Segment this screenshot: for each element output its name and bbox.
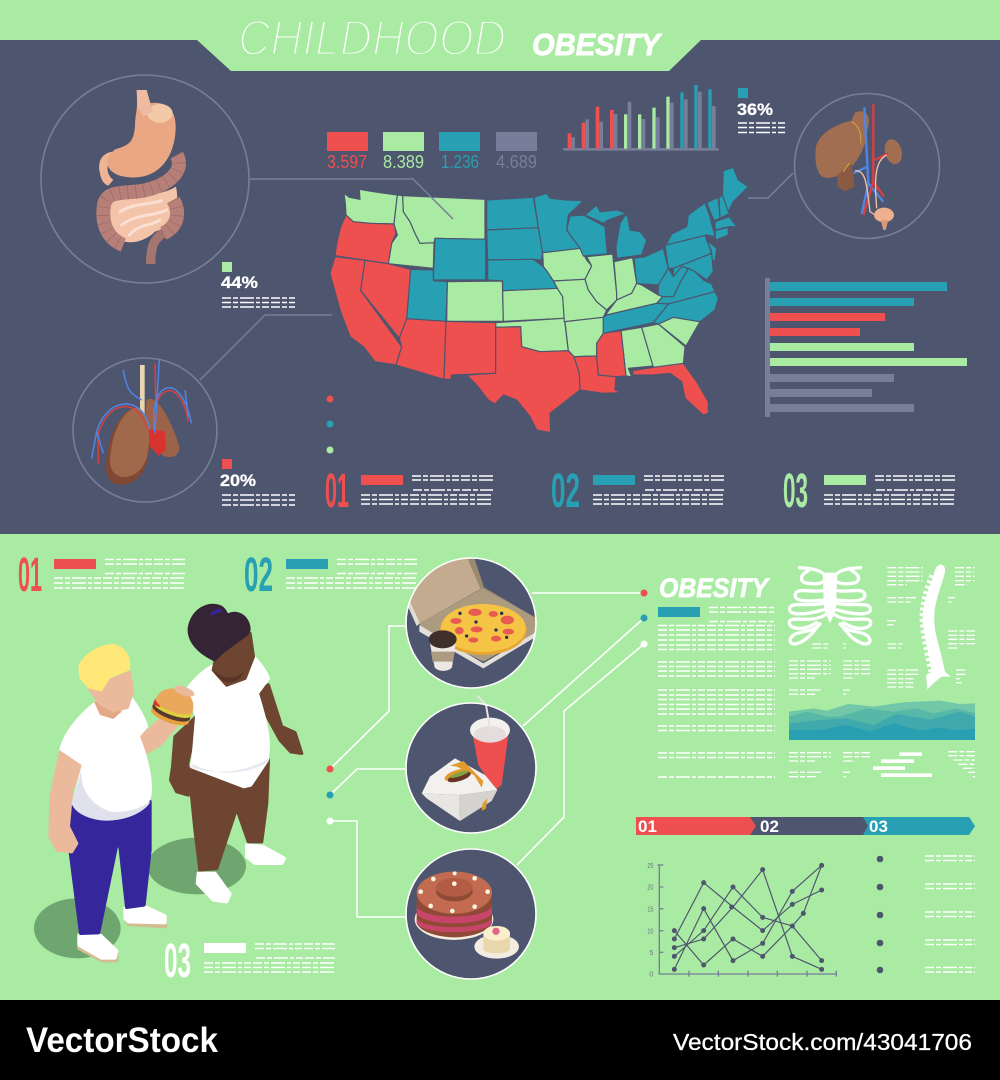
chart: horizontal bars bbox=[765, 278, 967, 417]
map: green states bbox=[344, 189, 700, 377]
stat: 20 percent: 20% bbox=[220, 471, 256, 490]
skeleton: ribcage, spine, captions and area chart bbox=[789, 564, 975, 777]
map: United States coloured by group bbox=[330, 167, 748, 433]
icon: burger in hand bbox=[149, 679, 200, 729]
circle: pizza and coffee bbox=[403, 555, 537, 688]
stat: 36 percent: 36% bbox=[737, 100, 773, 119]
text block: obesity body copy bbox=[658, 608, 775, 777]
character: girl bbox=[171, 604, 302, 902]
circle: liver, kidney, bladder bbox=[794, 94, 940, 238]
block 03 on green: 03 bbox=[164, 935, 191, 988]
list: chart legend dots and captions bbox=[877, 856, 975, 973]
legend: colour key with values bbox=[327, 132, 537, 172]
block 02 on green: 02 bbox=[244, 549, 273, 602]
footer: url text: VectorStock.com/43041706 bbox=[673, 1029, 972, 1055]
chart: line chart: 20 bbox=[647, 885, 653, 892]
stat: 44 percent bbox=[221, 262, 295, 307]
chart: line chart: 0 bbox=[649, 972, 653, 979]
circle: digestive organs bbox=[41, 75, 249, 283]
connector dots bbox=[326, 590, 648, 824]
connectors: food circles to dots bbox=[330, 593, 644, 917]
legend: colour key with values: 1.236 bbox=[441, 152, 479, 172]
footer: watermark bar bbox=[0, 1000, 1000, 1080]
block 01 in dark panel: 01 bbox=[325, 465, 349, 518]
circle: lungs and heart bbox=[73, 358, 217, 502]
arrow band: 01 02 03: 02 bbox=[760, 817, 779, 836]
block 01 on green bbox=[18, 549, 185, 602]
chart: layered area bbox=[789, 701, 975, 740]
legend: colour key with values: 3.597 bbox=[327, 152, 367, 172]
chart: line chart: 5 bbox=[649, 950, 653, 957]
connector lines: organs to map bbox=[200, 173, 793, 380]
icon: ribcage bbox=[789, 568, 871, 644]
arrow band: 01 02 03: 03 bbox=[869, 817, 888, 836]
icon: spine bbox=[922, 564, 951, 689]
map: teal states bbox=[407, 167, 748, 333]
chart: line chart: 10 bbox=[647, 928, 653, 935]
circle: burger box and soda bbox=[406, 696, 536, 833]
arrow band: 01 02 03: 01 bbox=[638, 817, 657, 836]
heading: obesity: OBESITY bbox=[659, 573, 771, 603]
legend dots bbox=[326, 396, 334, 454]
title: obesity: OBESITY bbox=[532, 27, 663, 62]
block 03 in dark panel: 03 bbox=[783, 465, 808, 518]
chart: mini column chart bbox=[563, 85, 719, 151]
illustration: two children with burger bbox=[34, 604, 302, 961]
stat: 36 percent bbox=[737, 88, 785, 132]
stat: 20 percent bbox=[220, 459, 295, 505]
character: boy bbox=[50, 644, 176, 961]
bar: obesity section accent bbox=[658, 607, 700, 617]
shadows bbox=[34, 838, 246, 958]
block 03 in dark panel bbox=[783, 465, 955, 518]
icon: soda cup bbox=[470, 696, 510, 790]
block 02 on green bbox=[244, 549, 417, 602]
legend: colour key with values: 8.389 bbox=[383, 152, 424, 172]
chart: line chart: 15 bbox=[647, 906, 653, 913]
title: childhood: CHILDHOOD bbox=[238, 10, 506, 66]
arrow band: 01 02 03 bbox=[636, 817, 975, 836]
block 02 in dark panel bbox=[551, 465, 724, 518]
footer: logo text: VectorStock bbox=[26, 1021, 219, 1060]
block 01 in dark panel bbox=[325, 465, 493, 518]
legend: colour key with values: 4.689 bbox=[496, 152, 537, 172]
icon: burger box bbox=[422, 758, 497, 821]
title bbox=[238, 10, 663, 66]
block 02 in dark panel: 02 bbox=[551, 465, 580, 518]
chart: line chart: 25 bbox=[647, 863, 653, 870]
block 01 on green: 01 bbox=[18, 549, 42, 602]
block 03 on green bbox=[164, 935, 335, 988]
chart: line chart bbox=[647, 863, 837, 979]
panel: dark top section with header notch bbox=[0, 40, 1000, 534]
map: red states bbox=[330, 215, 708, 433]
circle: cakes bbox=[406, 849, 536, 979]
captions around skeleton bbox=[789, 568, 975, 777]
small bars bbox=[873, 752, 932, 777]
stat: 44 percent: 44% bbox=[221, 273, 258, 292]
